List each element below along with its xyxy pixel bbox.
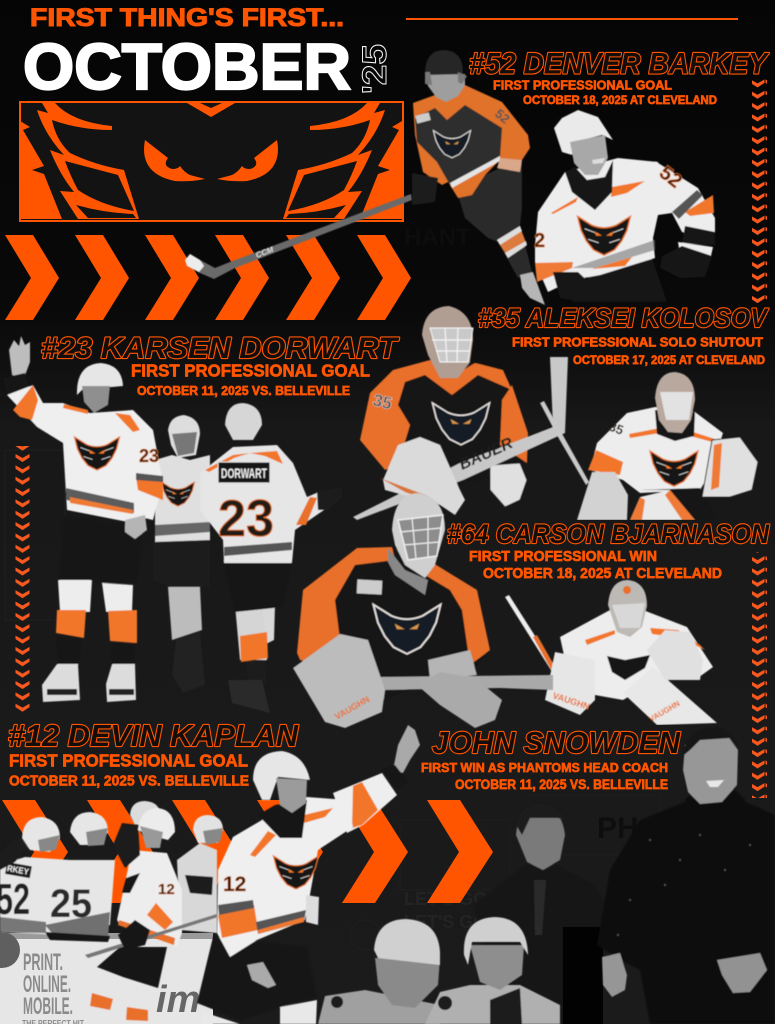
- bench players: [0, 801, 223, 942]
- sleeve: [333, 773, 397, 833]
- cuff and gloves: [682, 226, 715, 245]
- ad copy: [22, 949, 84, 1024]
- player: Aleksei Kolosov dark jersey: [353, 306, 568, 520]
- jersey: [217, 797, 353, 957]
- jersey: [117, 850, 182, 947]
- background: HANT: [404, 224, 471, 251]
- leg pad: [293, 634, 385, 728]
- cuff: [382, 765, 408, 790]
- ad copy: MOBILE.: [23, 993, 73, 1020]
- glove: [317, 487, 343, 510]
- text: John Snowden: FIRST WIN AS PHANTOMS HEAD COACH: [421, 760, 668, 775]
- player: Carson Bjarnason white jersey: VAUGHN: [551, 690, 591, 712]
- logo right eye: [217, 140, 278, 181]
- mask: [422, 306, 473, 378]
- pants and legs: [458, 158, 532, 278]
- jersey torso: [535, 158, 672, 292]
- chevron column: lower right: [752, 552, 767, 798]
- ad copy: ONLINE.: [23, 971, 71, 998]
- text: Karsen Dorwart: OCTOBER 11, 2025 VS. BELLEVILLE: [137, 384, 350, 398]
- background: LET'S GO: [404, 912, 487, 932]
- catch glove: [702, 437, 758, 497]
- jersey: [560, 610, 713, 700]
- chevron row: bottom: [2, 800, 493, 903]
- jersey: [200, 445, 324, 563]
- stick: [85, 914, 218, 958]
- stick: [504, 594, 552, 671]
- jersey: [7, 385, 163, 523]
- helmet and face: [425, 50, 463, 76]
- logo: [373, 605, 441, 654]
- helmet: [77, 363, 123, 395]
- player: Devin Kaplan: [197, 725, 420, 1024]
- face: [570, 135, 608, 175]
- text: Aleksei Kolosov: OCTOBER 17, 2025 AT CLEVELAND: [573, 355, 765, 367]
- pants: [197, 937, 317, 1020]
- player: Denver Barkey white jersey: [534, 110, 715, 302]
- background: LET'S GO: [404, 889, 487, 909]
- name plate: [218, 462, 270, 483]
- face: [276, 778, 307, 813]
- pants: [572, 258, 667, 302]
- player: Karsen Dorwart back view: DORWART: [221, 465, 267, 481]
- legs: [235, 605, 268, 660]
- bench player rear: [130, 801, 160, 825]
- player: Denver Barkey skating: [412, 50, 545, 305]
- black block: [563, 927, 603, 1024]
- legs: [85, 972, 120, 1020]
- Phantoms logo banner: [20, 102, 403, 221]
- player: Aleksei Kolosov dark jersey: BAUER: [457, 435, 516, 474]
- ad puck: [0, 932, 20, 968]
- blocker: [383, 437, 465, 515]
- head: [683, 732, 738, 804]
- text: John Snowden: JOHN SNOWDEN: [432, 725, 681, 760]
- text: Denver Barkey: [469, 48, 770, 107]
- helmet: [138, 808, 175, 840]
- player 25: [45, 812, 110, 942]
- pants: [60, 517, 143, 583]
- logo: [650, 451, 698, 486]
- skates: [42, 664, 80, 702]
- smile: [706, 780, 724, 787]
- cuff and hand: [232, 945, 263, 972]
- orange stripes: [535, 262, 573, 282]
- hand: [9, 336, 30, 378]
- glove: [490, 463, 527, 507]
- player: Karsen Dorwart waving: [3, 336, 163, 702]
- pads: [577, 472, 628, 520]
- sleeve: [655, 161, 715, 242]
- player: bench center bottom: [425, 917, 560, 1024]
- logo left wing: [20, 103, 139, 219]
- eyebrow heading: FIRST THING'S FIRST...: [30, 4, 344, 32]
- player 25: 25: [50, 882, 92, 926]
- sponsor patch: [415, 112, 431, 124]
- text: Karsen Dorwart: FIRST PROFESSIONAL GOAL: [131, 360, 370, 380]
- mask: [655, 372, 695, 433]
- chevron column: left: [15, 446, 30, 714]
- glove: [412, 173, 438, 205]
- text: Carson Bjarnason: FIRST PROFESSIONAL WIN: [469, 549, 657, 565]
- tie: [534, 880, 546, 935]
- player: Karsen Dorwart background teammate: [153, 415, 210, 693]
- cuff: [497, 158, 522, 172]
- head: [516, 805, 565, 870]
- coach: assistant seated: [473, 803, 607, 1024]
- boards and ad: im: [156, 979, 200, 1021]
- catch glove: [417, 672, 502, 728]
- mask: [392, 493, 445, 578]
- boards and ad: [0, 932, 213, 1024]
- pants: [223, 560, 292, 612]
- chevron column: upper right: [752, 79, 767, 305]
- text: Karsen Dorwart: #23 KARSEN DORWART: [41, 332, 400, 365]
- player: bench left bottom: [318, 919, 440, 1024]
- text: Carson Bjarnason: OCTOBER 18, 2025 AT CLEVELAND: [483, 566, 722, 582]
- sponsor patch: [357, 579, 382, 595]
- logo: [607, 655, 650, 680]
- raised hand: [393, 725, 420, 773]
- helmet: [554, 110, 613, 155]
- logo left eye: [144, 140, 205, 181]
- legs: [58, 580, 92, 612]
- player: skating number 12: [85, 808, 218, 1023]
- player: Carson Bjarnason white jersey: VAUGHN: [648, 699, 682, 724]
- text: John Snowden: [421, 725, 681, 792]
- jersey: [297, 547, 490, 700]
- text: Devin Kaplan: #12 DEVIN KAPLAN: [8, 718, 299, 753]
- sleeve number: 35: [371, 390, 394, 413]
- jersey: [360, 360, 528, 490]
- text: Denver Barkey: OCTOBER 18, 2025 AT CLEVELAND: [523, 93, 717, 107]
- collar: [565, 160, 613, 210]
- sleeve number: 23: [139, 446, 159, 466]
- left pad: [545, 652, 595, 715]
- hockey stick: [185, 194, 412, 279]
- glove: [647, 630, 703, 680]
- jersey: [590, 407, 723, 493]
- logo top notch: [187, 103, 235, 117]
- player: Carson Bjarnason dark jersey: VAUGHN: [333, 694, 371, 722]
- player 52: [0, 817, 115, 935]
- text: Aleksei Kolosov: [478, 303, 769, 367]
- player: Karsen Dorwart back view: [200, 403, 343, 713]
- stick: [540, 401, 589, 485]
- text: Devin Kaplan: FIRST PROFESSIONAL GOAL: [9, 750, 248, 770]
- text: Devin Kaplan: [8, 718, 299, 790]
- player: Aleksei Kolosov white jersey: [540, 372, 758, 520]
- back number: 23: [218, 490, 274, 548]
- logo: [433, 131, 471, 158]
- stick: [353, 357, 568, 520]
- chevron row: top: [5, 235, 411, 320]
- player: Denver Barkey white jersey: 2: [534, 230, 545, 252]
- bench player right: [177, 815, 223, 933]
- cuff: [3, 373, 30, 396]
- sleeve number: 12: [223, 873, 246, 896]
- sleeve number: 52: [492, 106, 513, 127]
- player: Carson Bjarnason dark jersey: [293, 493, 553, 728]
- logo: [74, 437, 120, 470]
- right hand: [717, 953, 767, 993]
- text: Denver Barkey: FIRST PROFESSIONAL GOAL: [493, 78, 672, 92]
- player 52: RKEY: [6, 863, 30, 877]
- player: Aleksei Kolosov white jersey: 35: [607, 419, 626, 438]
- player: skating number 12: 12: [158, 881, 175, 898]
- text: John Snowden: OCTOBER 11, 2025 VS. BELLEVILLE: [455, 777, 668, 792]
- hockey stick: CCM: [254, 245, 275, 260]
- suit: [473, 865, 607, 1024]
- numbers: 52: [655, 162, 686, 193]
- top rule: [406, 18, 738, 20]
- text: Devin Kaplan: OCTOBER 11, 2025 VS. BELLEVILLE: [9, 774, 249, 790]
- player: Carson Bjarnason white jersey: [505, 580, 717, 725]
- text: Karsen Dorwart: [41, 332, 400, 398]
- year label '25: '25: [356, 44, 394, 94]
- left hand: [602, 953, 627, 997]
- mask: [608, 580, 647, 637]
- face: [82, 386, 110, 413]
- logo: [432, 403, 490, 445]
- gloves: [113, 823, 140, 868]
- ad copy: PRINT.: [23, 949, 63, 976]
- blocker top: [428, 650, 477, 680]
- text: Aleksei Kolosov: FIRST PROFESSIONAL SOLO SHUTOUT: [512, 334, 763, 350]
- title: October: OCTOBER: [23, 30, 351, 103]
- pants: [97, 947, 167, 988]
- logo right wing: [283, 103, 402, 219]
- collar: [685, 790, 745, 828]
- helmet: [225, 403, 262, 440]
- logo: [578, 216, 630, 255]
- coach: John Snowden: [597, 728, 775, 1024]
- socks: [200, 1012, 240, 1024]
- collar: [258, 800, 307, 838]
- logo: [274, 856, 318, 889]
- text: Carson Bjarnason: [447, 519, 769, 582]
- droplets: [617, 834, 751, 936]
- background: PHAN: [597, 812, 682, 845]
- jacket: [597, 795, 775, 1024]
- jersey: [413, 85, 530, 198]
- hand on hip: [125, 515, 147, 539]
- stick: [380, 675, 553, 690]
- right pad: [627, 679, 718, 725]
- helmet: [253, 751, 310, 800]
